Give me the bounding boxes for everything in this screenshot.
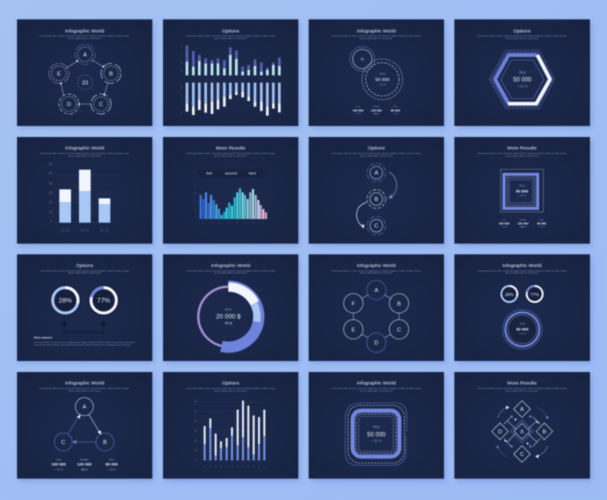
text block (332, 387, 421, 392)
stats: Last (356, 105, 360, 108)
panel: vertical ABC flow (309, 137, 444, 244)
text block (477, 152, 567, 157)
bar chart: 04 (220, 466, 223, 468)
text block: Lorem ipsum dolor sit amet, consectetur adipiscing elit. Tempor incididunt ut labore et dolore magna (186, 152, 275, 155)
axis labels: 30 (180, 104, 183, 106)
text block (186, 387, 275, 392)
text block: Ipsum aliqua dolor sit amet lorem (214, 272, 248, 275)
column chart: 30 (49, 191, 53, 195)
stats: Last (502, 219, 506, 222)
panel: pentagon cycle (17, 19, 152, 126)
text block (332, 269, 421, 275)
bar chart: 0 (195, 458, 197, 462)
stats: + 50 % (501, 227, 507, 229)
column chart: 40 (49, 181, 53, 185)
column chart: 20.10 (60, 228, 70, 232)
text block (477, 269, 567, 275)
triangle nodes: C (61, 440, 65, 446)
arrow: B to C (357, 202, 366, 229)
donut value (216, 307, 241, 326)
text block: Ipsum aliqua dolor sit amet lorem (68, 154, 102, 157)
caption (34, 336, 135, 347)
node C: C (374, 224, 378, 230)
stats: + 50 % (539, 227, 545, 229)
axis labels (194, 186, 263, 225)
text block: Ipsum aliqua dolor sit amet lorem (68, 272, 102, 275)
total ring: + 50 % (519, 333, 526, 335)
diamonds: D (498, 429, 502, 435)
panel: two percentage rings (17, 254, 152, 361)
text block: Lorem ipsum dolor sit amet, consectetur adipiscing elit. Tempor incididunt ut labore et dolore magna (186, 34, 275, 37)
axis labels: 20 (180, 95, 183, 97)
heading: Options (222, 381, 240, 387)
text block: Ipsum aliqua dolor sit amet lorem (214, 154, 248, 157)
bar chart: 60 (194, 400, 198, 404)
text block: Ipsum aliqua dolor sit amet lorem (360, 272, 393, 275)
heading: More Results (507, 381, 537, 387)
bar chart: 08 (242, 466, 245, 468)
text block: Lorem ipsum dolor sit amet, consectetur adipiscing elit. Tempor incididunt ut labore et dolore magna (477, 152, 567, 155)
diamonds (492, 401, 553, 462)
text block: Ipsum aliqua dolor sit amet lorem (214, 389, 248, 392)
nodes A to F: A (374, 288, 378, 294)
step value: + 50 % (518, 196, 526, 198)
text block: Ipsum aliqua dolor sit amet lorem (506, 272, 539, 275)
column chart: 60 (49, 162, 53, 166)
step value: 50 000 (516, 189, 529, 194)
triangle arrows (68, 414, 101, 444)
step circle: Step (379, 72, 386, 76)
stats: + 150 % (54, 469, 63, 471)
connector arrows (61, 321, 107, 332)
panel: tabbed gradient bars (163, 137, 298, 244)
text block (186, 34, 275, 40)
bar chart: 06 (231, 466, 234, 468)
panel: large donut (163, 254, 298, 361)
axis labels: 1 (211, 223, 212, 225)
text block: Ipsum aliqua dolor sit amet lorem (360, 389, 393, 392)
panel: rounded square progress (309, 372, 444, 479)
panel: step circles (309, 19, 444, 126)
diamonds: X (520, 429, 524, 435)
tabs: first (206, 172, 212, 176)
panel: square progress (454, 137, 590, 244)
axis labels: 10 (194, 210, 197, 212)
text block: Ipsum aliqua dolor sit amet lorem (214, 37, 248, 40)
stats: + 50 % (355, 113, 361, 115)
stats: Last (56, 457, 61, 461)
column chart: 10 (49, 210, 53, 214)
heading: Infographic World (357, 263, 396, 269)
step value: + 50 % (371, 439, 382, 443)
arrow: A to B (388, 172, 397, 198)
outer curved arrows (496, 406, 549, 458)
step value: 50 000 (513, 78, 532, 84)
stats: 180 % (520, 227, 526, 229)
bar chart: upper (187, 46, 279, 75)
axis labels: 3 (228, 223, 230, 225)
stats: Next (109, 457, 115, 461)
text block: Lorem ipsum dolor sit amet, consectetur adipiscing elit. Tempor incididunt ut labore et dolore magna (477, 34, 567, 37)
text block (40, 34, 129, 40)
step value: Step (373, 425, 380, 429)
bar chart (194, 400, 267, 468)
text block: Ipsum aliqua dolor sit amet lorem (506, 389, 539, 392)
text block (186, 269, 275, 275)
column chart: 20 (49, 200, 53, 204)
text block: Lorem ipsum dolor sit amet, consectetur adipiscing elit. Tempor incididunt ut labore et dolore magna (40, 269, 129, 272)
bar chart: lower (187, 83, 279, 116)
axis labels: 5 (245, 223, 247, 225)
panel: mirrored stacked bars (163, 19, 298, 126)
step value (367, 425, 386, 443)
stats: 100 000 (499, 222, 510, 226)
axis labels: 2 (219, 223, 221, 225)
donut value: 20 000 $ (216, 314, 241, 321)
heading: Infographic World (65, 381, 104, 387)
bar chart: 10 (194, 448, 198, 452)
heading: Infographic World (211, 263, 250, 269)
diamonds: B (542, 429, 546, 435)
node B: B (374, 197, 378, 203)
column chart: 20.11 (80, 228, 89, 232)
text block (332, 34, 421, 40)
panel: stacked column chart (17, 137, 152, 244)
bar chart: 11 (258, 466, 260, 468)
axis labels: 30 (180, 54, 183, 56)
heading: Infographic World (503, 263, 542, 269)
nodes A to F: C (397, 327, 401, 333)
text block: Ipsum aliqua dolor sit amet lorem (360, 154, 393, 157)
text block: Ipsum aliqua dolor sit amet lorem (506, 154, 539, 157)
axis labels: 10 (180, 71, 183, 73)
text block (332, 152, 421, 157)
bar chart: 20 (194, 438, 198, 442)
bar chart: 40 (194, 419, 198, 423)
total ring: 80 000 (516, 326, 529, 331)
stats: + 120 % (107, 469, 116, 471)
panel: triangle cycle (17, 372, 152, 479)
panel: rings and total (454, 254, 590, 361)
ring: 77%: 77% (97, 298, 110, 305)
text block: Ipsum aliqua dolor sit amet lorem (68, 389, 102, 392)
text block: Ipsum aliqua dolor sit amet lorem (360, 37, 393, 40)
bar chart: 30 (194, 429, 198, 433)
stats: Budget (373, 105, 380, 108)
nodes A to F: B (397, 301, 401, 307)
diamonds: A (520, 407, 524, 413)
text block: Lorem ipsum dolor sit amet, consectetur adipiscing elit. Tempor incididunt ut labore et dolore magna (186, 269, 275, 272)
heading: Infographic World (357, 28, 396, 34)
text block: Ipsum aliqua dolor sit amet lorem (68, 37, 102, 40)
donut value: 75 % (225, 322, 232, 326)
step circle: + 50 % (379, 84, 386, 86)
step value: Step (519, 184, 525, 188)
bar chart: 02 (209, 466, 211, 468)
text block: Lorem ipsum dolor sit amet, consectetur adipiscing elit. Tempor incididunt ut labore et dolore magna (332, 34, 421, 37)
rounded square diagram (345, 403, 407, 465)
heading: More Results (216, 146, 246, 152)
stats: + 50 % (392, 113, 399, 115)
stats: 180 % (374, 113, 379, 115)
column chart: 20.12 (100, 228, 109, 232)
stats: Next (540, 219, 544, 222)
text block (40, 152, 129, 157)
text block (186, 152, 275, 157)
gradient bar chart (201, 188, 266, 219)
axis labels: 4 (236, 223, 238, 225)
axis labels: 40 (180, 112, 183, 114)
center value: 33 (82, 80, 88, 86)
bar chart: 10 (253, 466, 256, 468)
node B: B (109, 71, 113, 77)
text block: Lorem ipsum dolor sit amet, consectetur adipiscing elit. Tempor incididunt ut labore et dolore magna (332, 269, 421, 272)
panel: twelve column chart (163, 372, 298, 479)
stats (353, 105, 400, 115)
total ring (503, 310, 542, 349)
text block (40, 387, 129, 392)
axis labels: 6 (253, 223, 255, 225)
bar chart: 09 (247, 466, 250, 468)
text block: Lorem ipsum dolor sit amet, consectetur adipiscing elit. Tempor incididunt ut labore et dolore magna (186, 387, 275, 390)
tabs: second (225, 172, 237, 176)
stats: 100 000 (51, 462, 67, 467)
bar chart: 07 (237, 466, 239, 468)
panel: six node ring (309, 254, 444, 361)
bar chart: 03 (215, 466, 218, 468)
pentagon diagram (49, 44, 121, 114)
hexagon diagram (489, 50, 555, 109)
bar chart: 50 (194, 409, 198, 413)
nodes A to F: F (352, 301, 356, 307)
caption: First season: (34, 336, 53, 340)
text block: Lorem ipsum dolor sit amet, consectetur adipiscing elit. Tempor incididunt ut labore et dolore magna (40, 34, 129, 37)
axis labels (180, 46, 183, 114)
ring: 77%: 77% (530, 292, 539, 297)
column chart (49, 162, 120, 232)
step value (516, 184, 529, 198)
step circle (362, 59, 403, 100)
stats: Budget (520, 219, 527, 222)
heading: Infographic World (357, 381, 396, 387)
diamonds: C (520, 452, 524, 458)
square diagram (501, 169, 543, 212)
text block (477, 387, 567, 392)
text block: Ipsum aliqua dolor sit amet lorem (506, 37, 539, 40)
node A: A (361, 57, 365, 62)
heading: Options (513, 28, 531, 34)
caption: Ut enim ad minim veniam, quis nostrud exercitation ullamco laboris nisi ut aliquip ex ea commodo (34, 344, 131, 347)
ring: 28%: 28% (505, 292, 514, 297)
donut chart (198, 286, 259, 347)
panel: hexagon progress (454, 19, 590, 126)
connecting arrows (60, 60, 108, 105)
stats: 120 000 (518, 222, 529, 226)
nodes A to F: E (351, 327, 355, 333)
heading: Infographic World (65, 28, 104, 34)
stats: 120 000 (371, 108, 382, 112)
stats: Next (393, 105, 398, 108)
node D: D (67, 102, 71, 108)
triangle nodes: A (82, 405, 86, 411)
bar chart: 05 (226, 466, 229, 468)
tabs (196, 169, 267, 177)
axis labels: 40 (180, 46, 183, 48)
nodes A to F (344, 280, 409, 352)
text block: Lorem ipsum dolor sit amet, consectetur adipiscing elit. Tempor incididunt ut labore et dolore magna (477, 269, 567, 272)
stats: Budget (80, 457, 89, 461)
text block: Lorem ipsum dolor sit amet, consectetur adipiscing elit. Tempor incididunt ut labore et dolore magna (332, 387, 421, 390)
text block (40, 269, 129, 275)
stats: 80 000 (106, 462, 119, 467)
ring: 28%: 28% (59, 298, 72, 305)
step value: Step (519, 70, 526, 74)
heading: Infographic World (65, 146, 104, 152)
stats: 100 000 (353, 108, 364, 112)
donut value: Sum (225, 307, 232, 311)
step circle: 50 000 (375, 77, 390, 82)
node C: C (99, 102, 103, 108)
triangle nodes: B (103, 440, 107, 446)
column chart: 50 (49, 172, 53, 176)
node links (353, 295, 399, 338)
step value: + 50 % (517, 85, 528, 89)
heading: Options (222, 28, 240, 34)
column chart: 0 (50, 220, 52, 224)
stats: 120 000 (77, 462, 92, 467)
axis labels: 20 (180, 62, 183, 64)
node A: A (374, 171, 378, 177)
panel: diamond network (454, 372, 590, 479)
text block: Lorem ipsum dolor sit amet, consectetur adipiscing elit. Tempor incididunt ut labore et dolore magna (40, 152, 129, 155)
stats: 80 000 (537, 222, 547, 226)
axis labels: 10 (180, 86, 183, 88)
bar chart: 12 (263, 466, 265, 468)
axis labels: 0 (195, 218, 197, 220)
axis labels: 40 (194, 186, 197, 188)
bar chart: 01 (204, 466, 206, 468)
stats: 180 % (81, 469, 88, 471)
node A: A (83, 52, 87, 58)
total ring: Step (520, 322, 526, 326)
step value (513, 70, 532, 89)
stats (51, 457, 119, 471)
stats (499, 219, 547, 229)
axis labels: 0 (202, 223, 204, 225)
axis labels: 30 (194, 194, 197, 196)
caption: Lorem ipsum dolor sit amet, consectetur adipiscing elit. Tempor incididunt ut labore et dolore magna aliqua lorem dolore (34, 341, 135, 344)
text block: Lorem ipsum dolor sit amet, consectetur adipiscing elit. Tempor incididunt ut labore et dolore magna (40, 387, 129, 390)
tabs: third (249, 172, 256, 176)
axis labels: 20 (194, 202, 197, 204)
node E: E (57, 71, 61, 77)
text block: Lorem ipsum dolor sit amet, consectetur adipiscing elit. Tempor incididunt ut labore et dolore magna (332, 152, 421, 155)
heading: More Results (507, 146, 537, 152)
triangle nodes (54, 398, 114, 451)
text block: Lorem ipsum dolor sit amet, consectetur adipiscing elit. Tempor incididunt ut labore et dolore magna (477, 387, 567, 390)
axis labels: 7 (262, 223, 263, 225)
nodes A to F: D (374, 341, 378, 347)
heading: Options (368, 146, 385, 152)
text block (477, 34, 567, 40)
connectors (504, 416, 540, 447)
step value: 50 000 (367, 432, 386, 438)
stats: 80 000 (391, 108, 400, 112)
heading: Options (76, 263, 94, 269)
